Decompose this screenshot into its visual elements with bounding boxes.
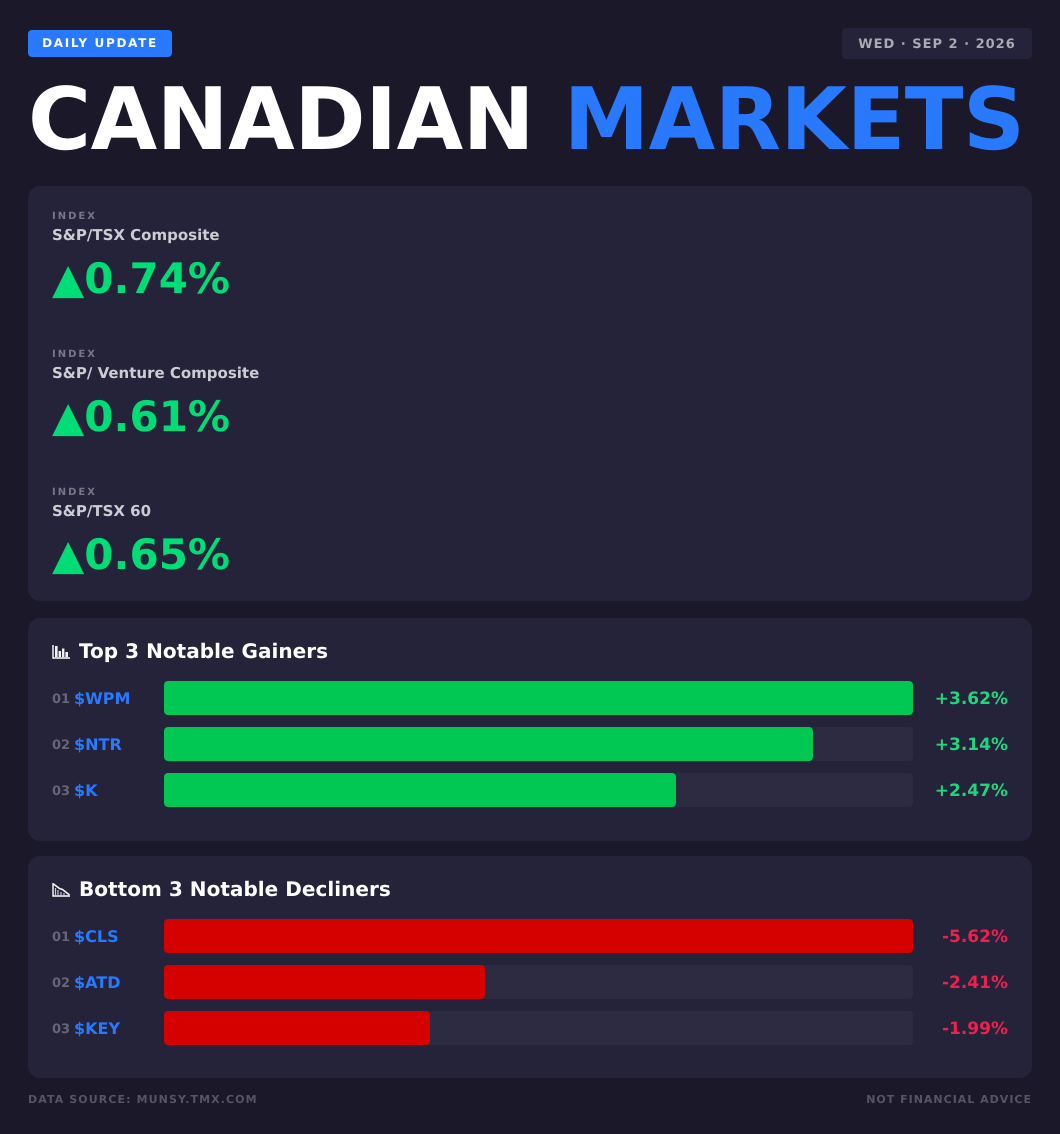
row: NTR: 02	[52, 738, 70, 753]
row: CLS	[52, 919, 1008, 953]
date badge: WED · SEP 2 · 2026	[858, 37, 1016, 52]
index: S&P/ Venture Composite: ▲0.61%	[52, 392, 230, 441]
row: K: $K	[74, 781, 98, 800]
index: S&P/TSX Composite: S&P/TSX Composite	[52, 226, 220, 244]
heading: decliners: Bottom 3 Notable Decliners	[79, 877, 391, 901]
row: ATD: 02	[52, 976, 70, 991]
panel: gainers	[28, 618, 1032, 841]
row: NTR: +3.14%	[935, 735, 1008, 755]
index: S&P/TSX Composite	[52, 211, 230, 303]
row: NTR	[52, 727, 1008, 761]
panel: decliners	[28, 856, 1032, 1078]
row: CLS: -5.62%	[942, 927, 1008, 947]
index: S&P/TSX 60	[52, 487, 230, 579]
row: CLS: $CLS	[74, 927, 119, 946]
row: KEY: $KEY	[74, 1019, 120, 1038]
row: WPM: 01	[52, 692, 70, 707]
row: NTR: $NTR	[74, 735, 122, 754]
index: S&P/TSX 60: S&P/TSX 60	[52, 502, 151, 520]
row: KEY: -1.99%	[942, 1019, 1008, 1039]
footer: disclaimer: NOT FINANCIAL ADVICE	[866, 1093, 1032, 1106]
index: S&P/TSX 60: ▲0.65%	[52, 530, 230, 579]
row: K	[52, 773, 1008, 807]
heading: gainers: Top 3 Notable Gainers	[79, 639, 328, 663]
row: KEY: 03	[52, 1022, 70, 1037]
index: S&P/TSX 60: INDEX	[52, 487, 97, 498]
row: WPM	[52, 681, 1008, 715]
row: WPM: $WPM	[74, 689, 130, 708]
row: KEY	[52, 1011, 1008, 1045]
row: ATD	[52, 965, 1008, 999]
row: CLS: 01	[52, 930, 70, 945]
row: ATD: $ATD	[74, 973, 120, 992]
index: S&P/TSX Composite: INDEX	[52, 211, 97, 222]
index: S&P/ Venture Composite	[52, 349, 259, 441]
icon: bar chart	[52, 645, 70, 659]
index: S&P/ Venture Composite: S&P/ Venture Composite	[52, 364, 259, 382]
row: K: +2.47%	[935, 781, 1008, 801]
footer: source: DATA SOURCE: MUNSY.TMX.COM	[28, 1093, 258, 1106]
icon: declining chart	[52, 883, 70, 897]
row: ATD: -2.41%	[942, 973, 1008, 993]
row: WPM: +3.62%	[935, 689, 1008, 709]
index: S&P/TSX Composite: ▲0.74%	[52, 254, 230, 303]
date badge	[842, 28, 1032, 59]
badge: daily update: DAILY UPDATE	[42, 36, 158, 50]
row: K: 03	[52, 784, 70, 799]
panel: indices	[28, 186, 1032, 601]
title: CANADIAN MARKETS	[28, 70, 1024, 170]
index: S&P/ Venture Composite: INDEX	[52, 349, 97, 360]
badge: daily update	[28, 30, 172, 57]
